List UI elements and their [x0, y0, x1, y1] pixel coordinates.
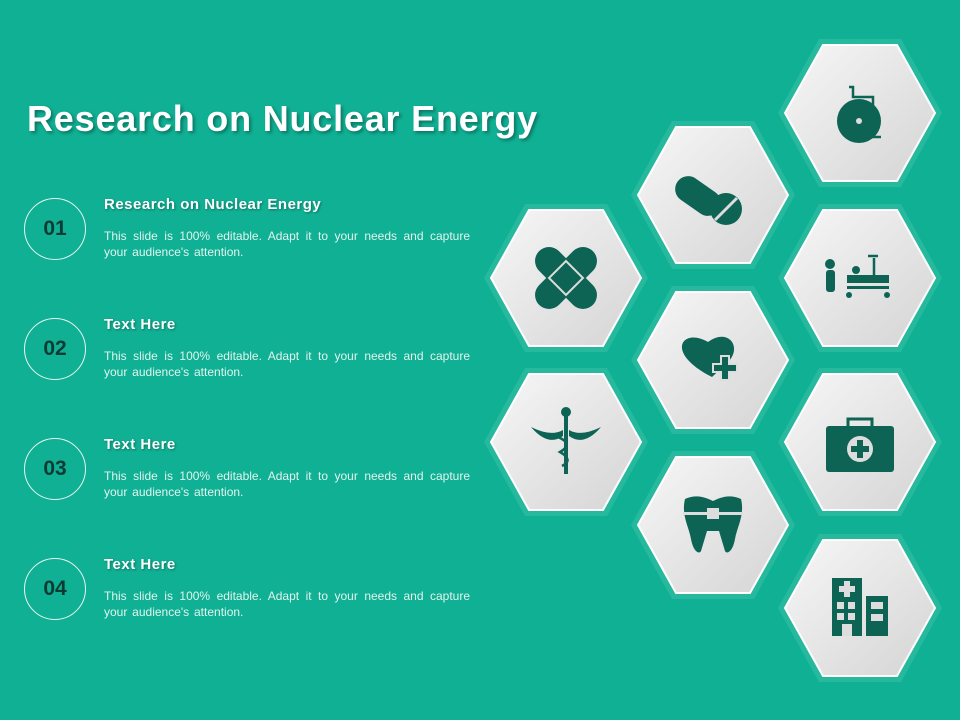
hex: tooth	[631, 451, 795, 599]
item 02: Text Here	[104, 316, 176, 333]
item 01: Research on Nuclear Energy	[104, 196, 321, 213]
item 01	[24, 196, 470, 260]
hex: pill	[631, 121, 795, 269]
item 03: 03	[43, 457, 67, 480]
hex: hospital building	[778, 534, 942, 682]
hex: patient bed	[778, 204, 942, 352]
hex: bandage	[484, 204, 648, 352]
item 03: This slide is 100% editable. Adapt it to your needs and capture your audience's attention.	[104, 469, 470, 499]
hex: wheelchair	[778, 39, 942, 187]
item 03: Text Here	[104, 436, 176, 453]
hex: caduceus	[484, 368, 648, 516]
hex: heart plus	[631, 286, 795, 434]
item 02	[24, 316, 470, 380]
item 04: This slide is 100% editable. Adapt it to your needs and capture your audience's attention.	[104, 589, 470, 619]
item 04: 04	[43, 577, 67, 600]
item 04	[24, 556, 470, 620]
item 01: 01	[43, 217, 67, 240]
item 02: This slide is 100% editable. Adapt it to your needs and capture your audience's attention.	[104, 349, 470, 379]
item 02: 02	[43, 337, 67, 360]
title: Research on Nuclear Energy	[27, 98, 538, 139]
hex: medical kit	[778, 368, 942, 516]
item 01: This slide is 100% editable. Adapt it to your needs and capture your audience's attention.	[104, 229, 470, 259]
item 03	[24, 436, 470, 500]
item 04: Text Here	[104, 556, 176, 573]
